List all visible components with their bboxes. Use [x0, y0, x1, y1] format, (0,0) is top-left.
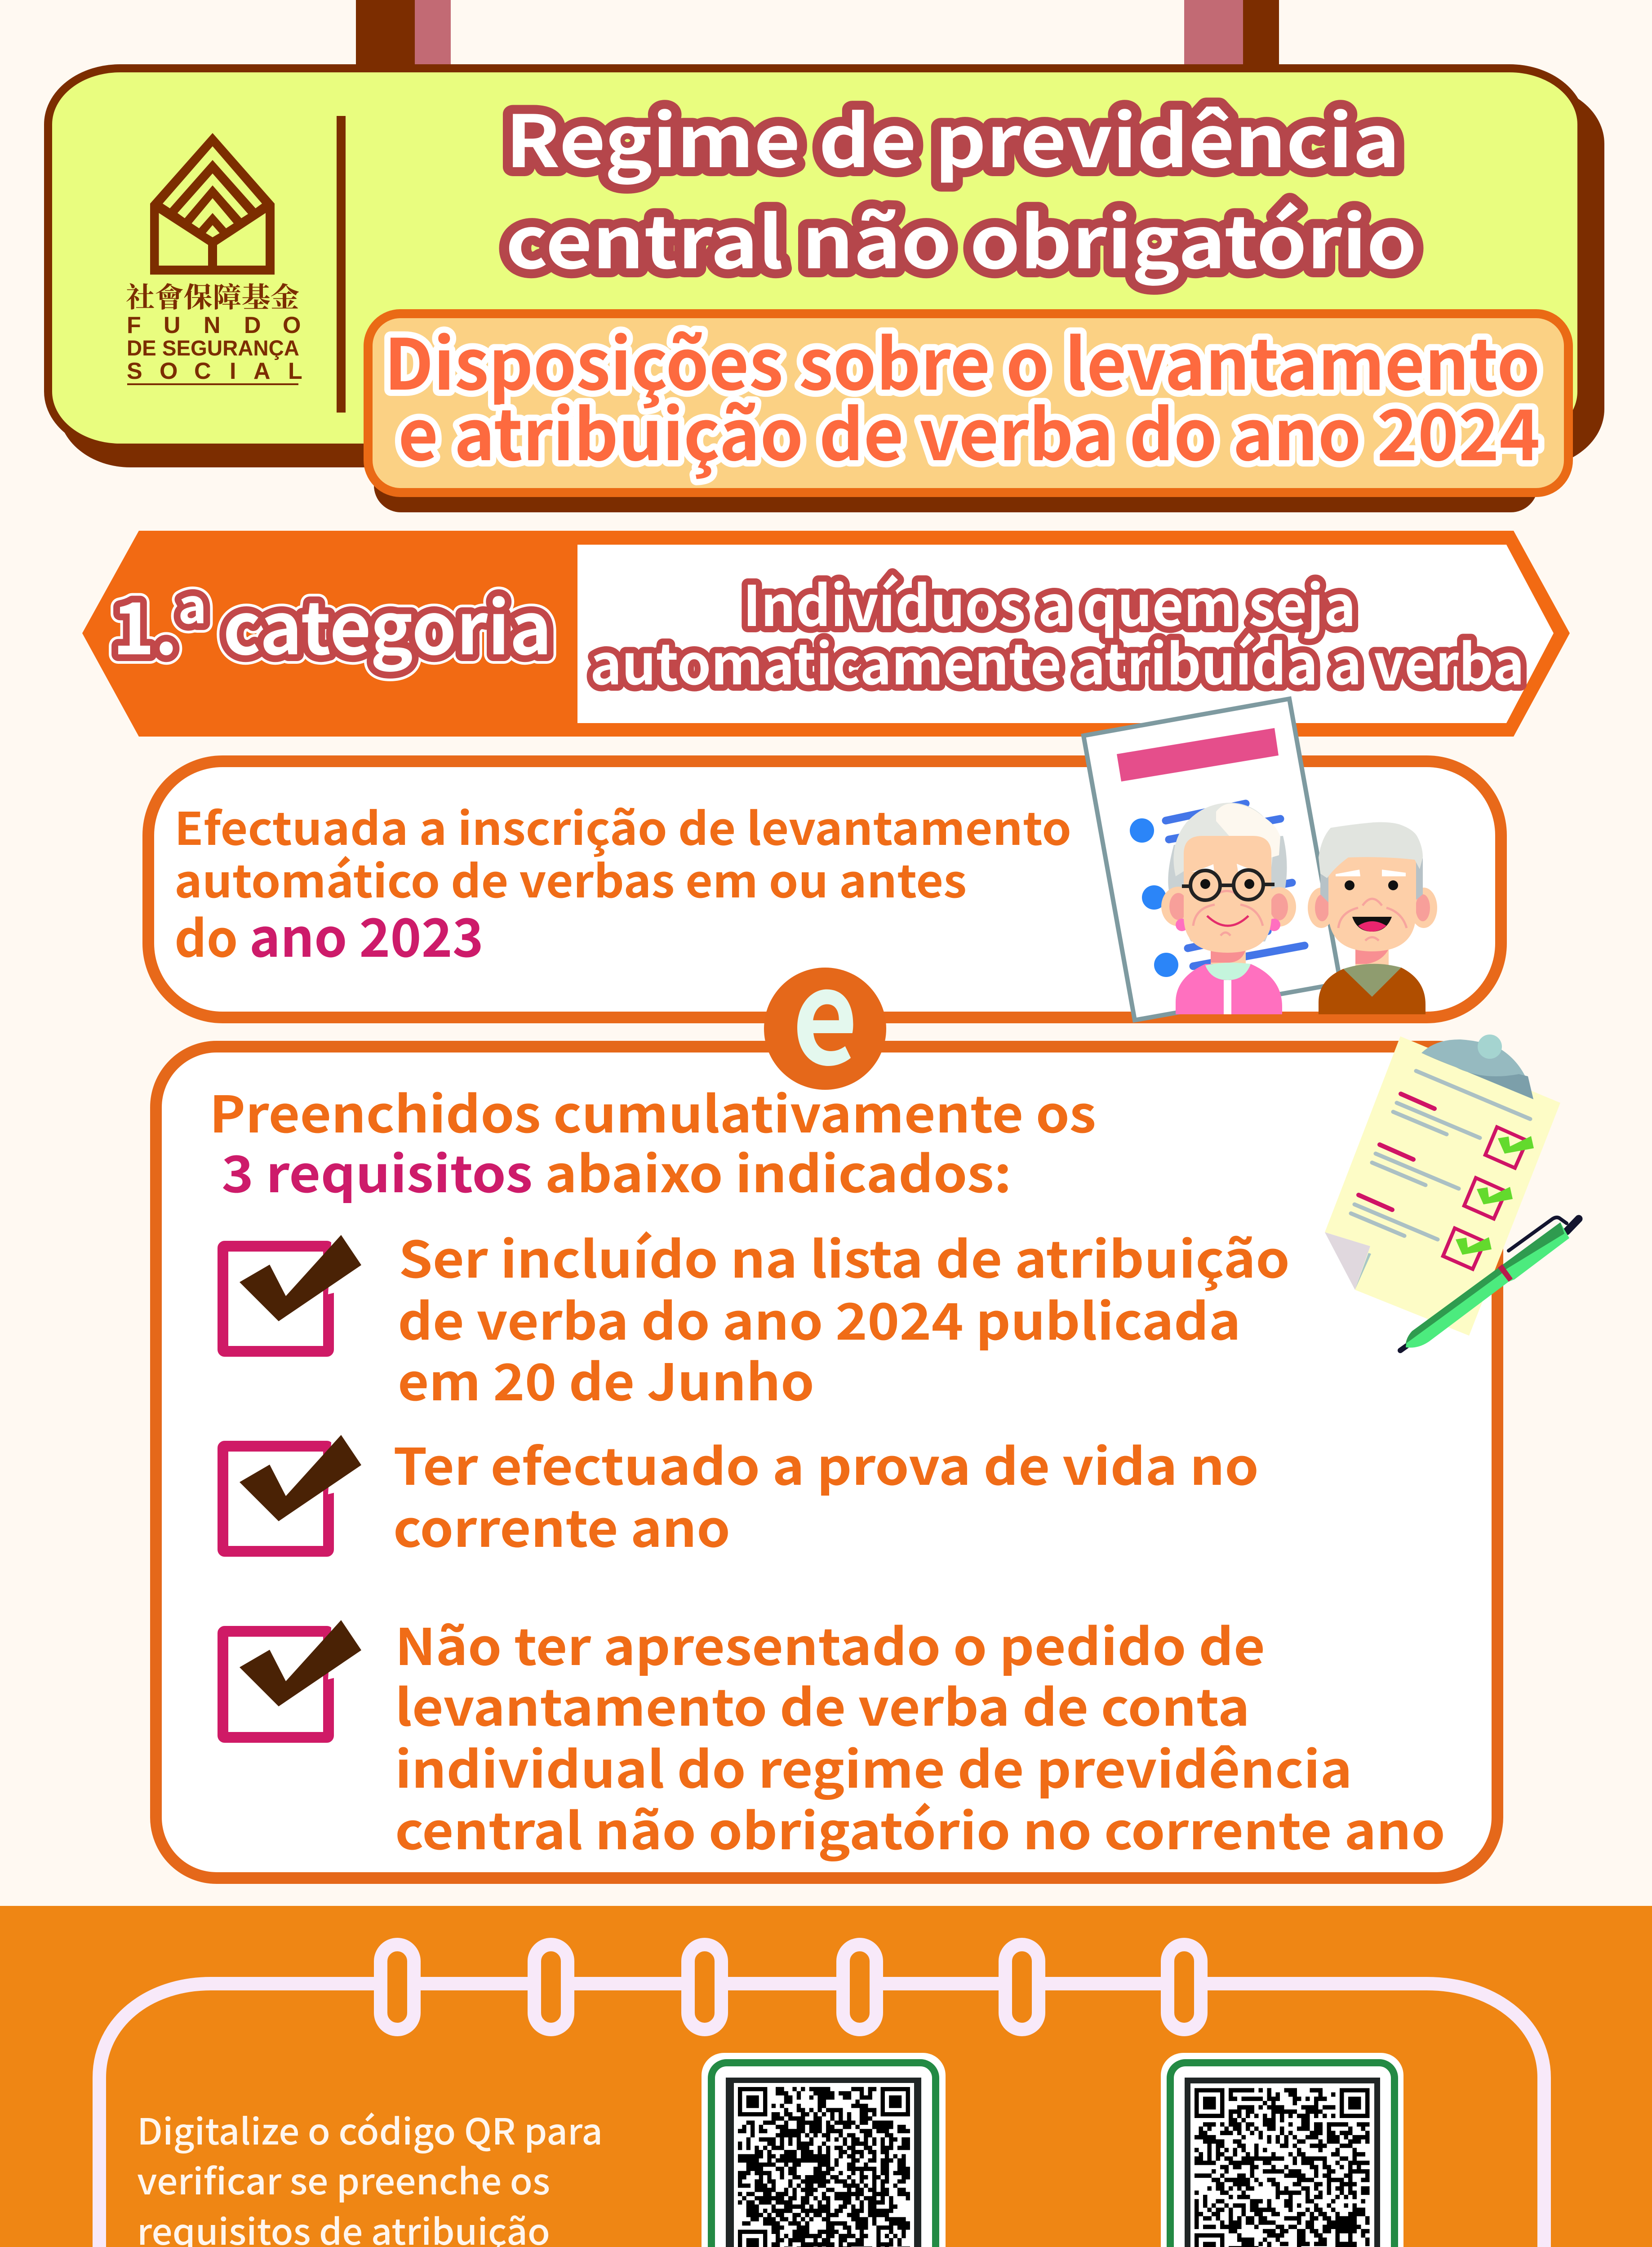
requirement 2: Ter efectuado a prova de vida no — [393, 1427, 1259, 1500]
illustration: checklist clipboard — [1325, 1035, 1560, 1336]
requirement 3 — [223, 1607, 1445, 1864]
requirement 3: levantamento de verba de conta — [395, 1668, 1250, 1741]
title: central não obrigatório — [506, 185, 1417, 289]
panel: condition 2: Preenchidos cumulativamente os — [209, 1075, 1096, 1147]
panel: subtitle — [368, 308, 1568, 512]
panel: condition 2 — [156, 1047, 1497, 1878]
logo: Fundo de Segurança Social: SOCIAL — [127, 358, 302, 384]
panel: subtitle: e atribuição de verba do ano 2024 — [398, 379, 1540, 480]
banner: 1.ª categoria: 1.ª categoria — [112, 571, 552, 675]
QR code: FSS website — [702, 2053, 946, 2247]
title — [506, 84, 1417, 289]
logo: Fundo de Segurança Social — [126, 133, 302, 385]
illustration: elderly man — [1308, 822, 1437, 1014]
requirement 1: em 20 de Junho — [398, 1342, 814, 1415]
requirement 3: individual do regime de previdência — [395, 1730, 1352, 1803]
illustration: pen — [1400, 1217, 1579, 1350]
instruction text: verificar se preenche os — [137, 2153, 550, 2205]
instruction text — [137, 2103, 603, 2247]
requirement 1 — [223, 1220, 1290, 1415]
panel: header — [48, 68, 1604, 467]
requirement 2: corrente ano — [393, 1489, 730, 1562]
banner: 1.ª categoria: Indivíduos a quem seja — [743, 561, 1356, 642]
panel: condition 1: do ano 2023 — [174, 895, 484, 972]
banner: 1.ª categoria: automaticamente atribuída a verba — [590, 620, 1524, 701]
QR code: Conta Única de Macau — [1161, 2053, 1403, 2247]
logo: Fundo de Segurança Social: DE SEGURANÇA — [127, 337, 299, 360]
panel: condition 2: 3 requisitos abaixo indicados: — [222, 1134, 1012, 1207]
panel: condition 1 — [148, 761, 1501, 1017]
banner: 1.ª categoria — [82, 531, 1570, 737]
illustration: elderly woman — [1161, 803, 1296, 1014]
requirement 3: central não obrigatório no corrente ano — [395, 1791, 1445, 1864]
connector: e: e — [792, 913, 858, 1102]
banner: 1.ª categoria: 1.ª categoria — [112, 571, 552, 675]
notebook outline — [99, 1984, 1544, 2247]
connector: e — [764, 913, 886, 1102]
hanging straps — [356, 0, 1279, 72]
panel: condition 1: automático de verbas em ou antes — [174, 845, 967, 910]
requirement 3: Não ter apresentado o pedido de — [395, 1607, 1265, 1680]
notebook rings — [381, 1945, 1201, 2029]
logo: Fundo de Segurança Social: FUNDO — [127, 312, 301, 338]
instruction text: Digitalize o código QR para — [137, 2103, 603, 2155]
panel: subtitle: Disposições sobre o levantamento — [384, 308, 1540, 410]
illustration: document — [1084, 699, 1341, 1020]
logo: Fundo de Segurança Social: 社會保障基金 — [126, 275, 299, 315]
title: Regime de previdência — [506, 84, 1400, 188]
requirement 1: Ser incluído na lista de atribuição — [399, 1220, 1290, 1292]
panel: condition 1: Efectuada a inscrição de levantamento — [174, 793, 1071, 858]
footer background — [0, 1906, 1652, 2247]
requirement 2 — [223, 1427, 1259, 1562]
requirement 1: de verba do ano 2024 publicada — [398, 1282, 1241, 1354]
